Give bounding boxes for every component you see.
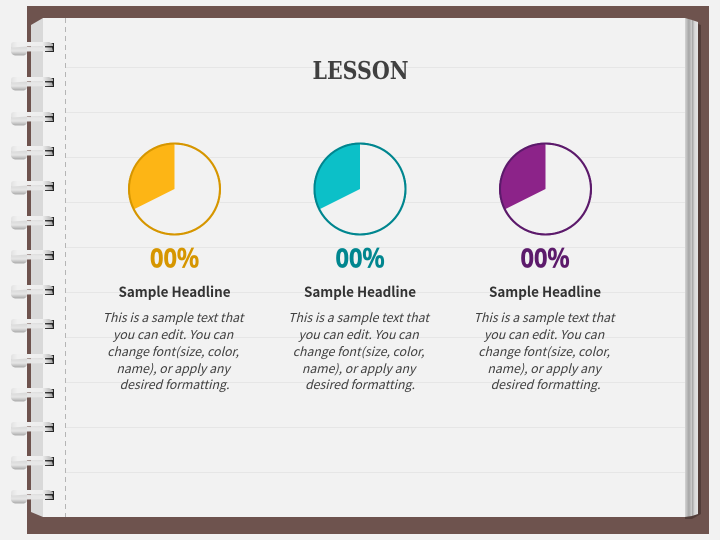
body text: change font(size, color, bbox=[107, 342, 239, 360]
panel: column 1 bbox=[103, 143, 246, 393]
body text: desired formatting. bbox=[305, 375, 415, 393]
binding strip bbox=[31, 18, 43, 517]
body text: desired formatting. bbox=[120, 375, 229, 393]
body text: name), or apply any bbox=[116, 359, 232, 377]
body text: you can edit. You can bbox=[112, 325, 234, 343]
headline: Sample Headline bbox=[118, 282, 230, 302]
percentage: 00% bbox=[520, 239, 570, 275]
panel: column 3 bbox=[474, 143, 617, 393]
right page stack bbox=[685, 18, 701, 519]
headline: Sample Headline bbox=[489, 282, 601, 302]
headline: Sample Headline bbox=[304, 282, 416, 302]
title: LESSON bbox=[312, 56, 408, 85]
panel: column 2 bbox=[288, 143, 432, 393]
pie chart: amber bbox=[129, 143, 220, 234]
pie chart: teal bbox=[314, 143, 406, 234]
body text: you can edit. You can bbox=[483, 325, 605, 343]
body text: This is a sample text that bbox=[474, 308, 616, 326]
body text: desired formatting. bbox=[491, 375, 600, 393]
body text: name), or apply any bbox=[487, 359, 603, 377]
spiral rings bbox=[11, 42, 54, 504]
percentage: 00% bbox=[336, 239, 384, 275]
body text: you can edit. You can bbox=[297, 325, 419, 343]
body text: This is a sample text that bbox=[288, 308, 430, 326]
body text: name), or apply any bbox=[302, 359, 417, 377]
body text: This is a sample text that bbox=[103, 308, 245, 326]
body text: change font(size, color, bbox=[293, 342, 424, 360]
pie chart: purple bbox=[500, 143, 591, 234]
percentage: 00% bbox=[150, 239, 199, 275]
body text: change font(size, color, bbox=[478, 342, 610, 360]
